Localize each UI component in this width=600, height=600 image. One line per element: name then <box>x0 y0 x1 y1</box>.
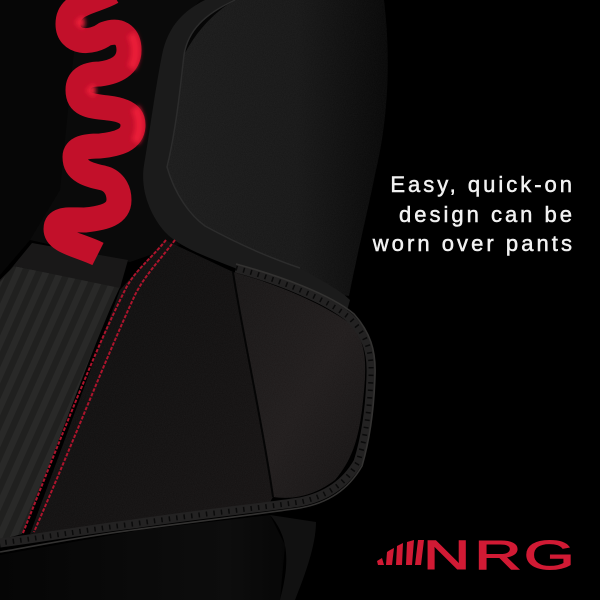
caption text <box>372 172 575 256</box>
carbon fibre panel <box>0 266 120 540</box>
red stitching <box>23 240 175 533</box>
trim band light rim <box>167 0 300 268</box>
upper leg fabric <box>160 0 388 296</box>
trim band around upper leg <box>143 0 350 318</box>
caption line 1: Easy, quick-on <box>390 172 575 197</box>
caption line 2: design can be <box>399 202 575 227</box>
pad right panel <box>233 272 365 498</box>
seam between pad panels <box>233 272 273 497</box>
lower flap <box>270 515 316 600</box>
centre strap <box>30 0 200 262</box>
left dark inner strap <box>0 0 235 275</box>
lower leg <box>0 515 285 600</box>
icon: signal bars <box>377 540 424 565</box>
pad left panel <box>30 240 273 534</box>
NRG logo <box>377 532 575 578</box>
pad edge binding <box>0 268 371 543</box>
red wave lacing <box>56 0 140 254</box>
top trim over carbon panel <box>0 243 128 288</box>
logo wordmark: NRG <box>423 532 575 578</box>
caption line 3: worn over pants <box>372 231 575 256</box>
photo: knee pad garment <box>0 0 388 600</box>
